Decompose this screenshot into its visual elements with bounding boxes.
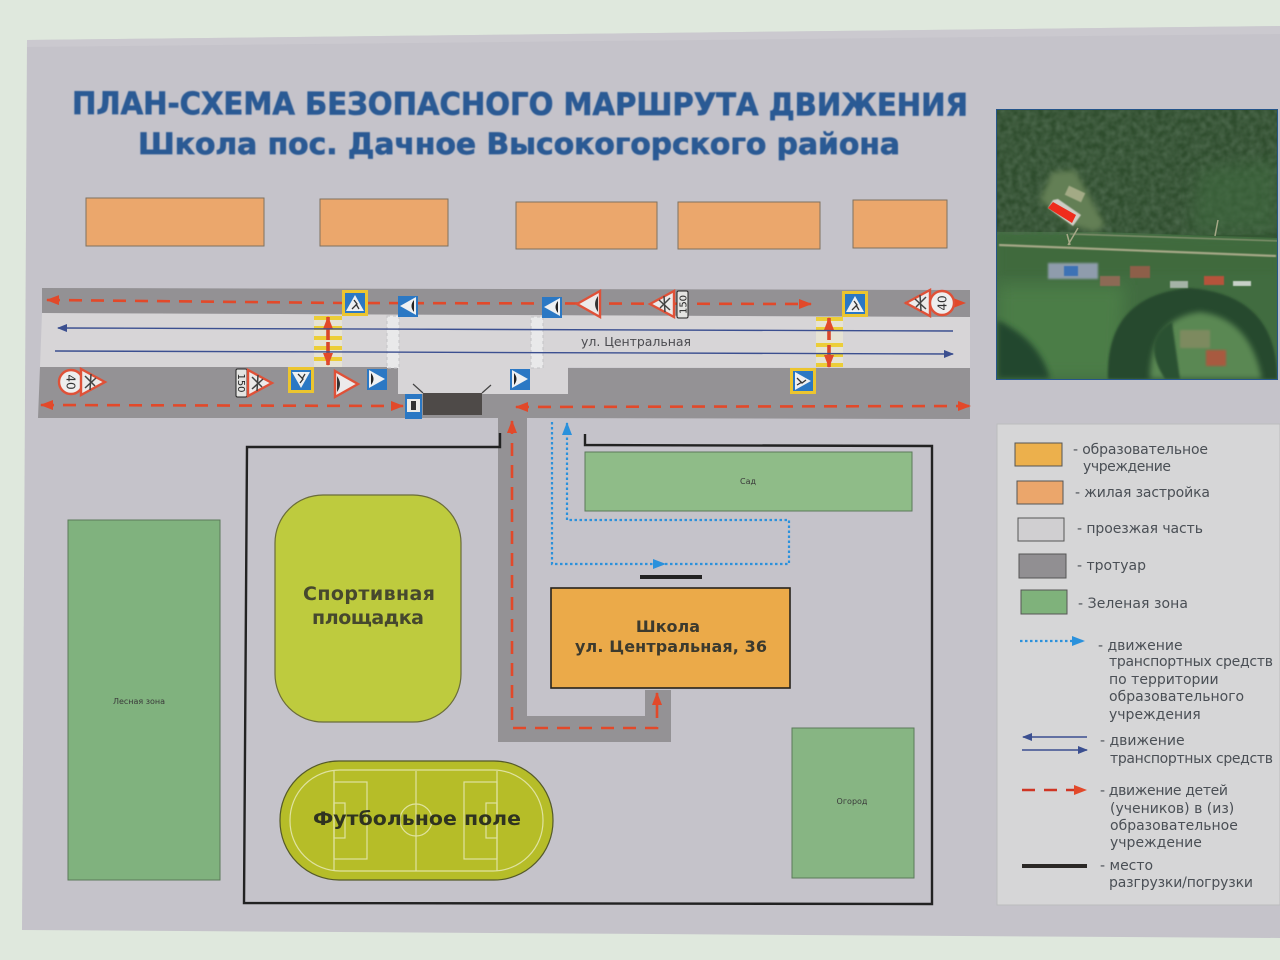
panel: forest zone <box>68 520 220 880</box>
panel: garden: Сад <box>740 477 756 486</box>
title <box>72 86 968 161</box>
street label: ул. Центральная <box>581 334 691 349</box>
bottom road signs <box>59 367 816 397</box>
panel: football field: Футбольное поле <box>313 809 521 830</box>
legend swatch: education: - образовательное <box>1073 442 1208 458</box>
top road signs <box>342 290 954 318</box>
panel: school: ул. Центральная, 36 <box>575 637 767 656</box>
road <box>40 313 970 368</box>
legend swatch: housing: - жилая застройка <box>1075 485 1210 501</box>
panel: forest zone: Лесная зона <box>113 697 165 706</box>
legend: vehicle route on school territory: - движение <box>1098 638 1183 654</box>
legend: children route: - движение детей <box>1100 783 1228 799</box>
panel: school <box>551 588 790 688</box>
bus stop <box>405 384 491 419</box>
legend swatch: roadway: - проезжая часть <box>1077 521 1203 537</box>
legend: vehicle route on school territory: образовательного <box>1109 689 1244 705</box>
top road signs: 40 <box>936 295 950 311</box>
panel: football field <box>280 761 553 880</box>
legend: loading place <box>1022 858 1253 891</box>
legend swatch: housing <box>1017 481 1210 504</box>
legend: loading place: - место <box>1100 858 1153 874</box>
bottom road signs: 40 <box>64 374 78 390</box>
vehicle route dots <box>552 422 789 564</box>
legend swatch: sidewalk: - тротуар <box>1077 558 1146 574</box>
legend swatch: education <box>1015 442 1208 475</box>
legend: vehicle route on school territory: учреждения <box>1109 707 1201 723</box>
legend: vehicle traffic: - движение <box>1100 733 1185 749</box>
legend swatch: sidewalk <box>1019 554 1146 578</box>
left crosswalk <box>314 316 342 367</box>
legend: children route: образовательное <box>1110 818 1238 834</box>
panel: legend <box>997 424 1280 905</box>
panel: sports ground: площадка <box>312 607 424 629</box>
legend: children route: учреждение <box>1110 835 1202 851</box>
legend: children route <box>1022 783 1238 851</box>
traffic lines <box>55 328 953 354</box>
legend: children route: (учеников) в (из) <box>1110 801 1234 817</box>
residential buildings <box>86 198 947 249</box>
legend: vehicle route on school territory: по территории <box>1109 672 1219 688</box>
panel: school: Школа <box>636 617 700 636</box>
panel: vegetable garden: Огород <box>837 797 868 806</box>
checkered unmarked crossing right <box>531 317 543 368</box>
legend swatch: green zone: - Зеленая зона <box>1078 596 1188 612</box>
legend: vehicle route on school territory <box>1020 638 1273 723</box>
satellite photo <box>996 109 1280 380</box>
bottom road signs: 150 <box>235 373 246 393</box>
panel: garden <box>585 452 912 511</box>
top sidewalk <box>42 288 970 317</box>
legend swatch: education: учреждение <box>1083 459 1171 475</box>
panel: sports ground: Спортивная <box>303 583 435 605</box>
bottom sidewalk with school path <box>38 367 970 742</box>
panel: vegetable garden <box>792 728 914 878</box>
legend: vehicle route on school territory: транспортных средств <box>1109 654 1273 670</box>
legend: vehicle traffic: транспортных средств <box>1110 751 1273 767</box>
child route dashes <box>41 300 970 728</box>
legend: loading place: разгрузки/погрузки <box>1109 875 1253 891</box>
legend swatch: roadway <box>1018 518 1203 541</box>
legend swatch: green zone <box>1021 590 1188 614</box>
title: ПЛАН-СХЕМА БЕЗОПАСНОГО МАРШРУТА ДВИЖЕНИЯ <box>72 86 968 124</box>
panel: sports ground <box>275 495 461 722</box>
checkered unmarked crossing left <box>387 316 399 368</box>
top road signs: 150 <box>678 295 690 314</box>
right crosswalk <box>816 317 843 367</box>
school fence <box>244 433 932 904</box>
loading place <box>640 575 702 579</box>
subtitle: Школа пос. Дачное Высокогорского района <box>138 127 900 161</box>
legend: vehicle traffic <box>1022 733 1273 767</box>
